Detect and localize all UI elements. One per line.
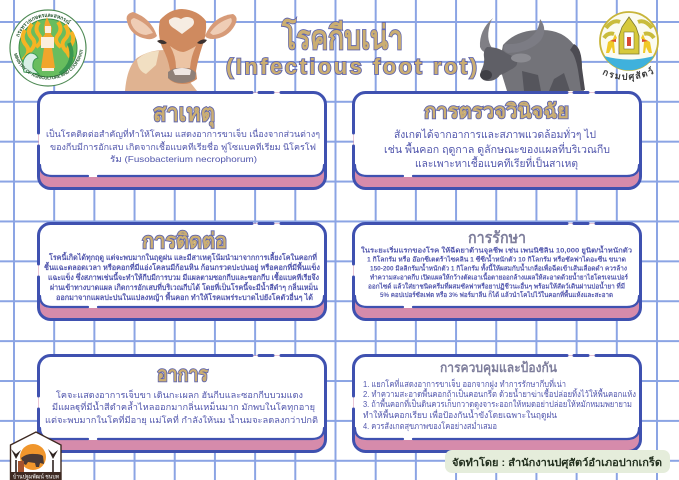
text block: 2. ทำความสะอาดพื้นคอกถ้าเป็นคอนกรีต ด้วยน้ำยาฆ่าเชื้อปล่อยทิ้งไว้ให้พื้นคอกแห้ง	[363, 388, 636, 399]
text block: ทำให้พื้นคอกเรียบ เพื่อป้องกันน้ำขังโดยเฉพาะในฤดูฝน	[363, 409, 557, 421]
credit badge: จัดทำโดย : สำนักงานปศุสัตว์อำเภอปากเกร็ด	[452, 455, 662, 469]
text block: ในระยะเริ่มแรกของโรค ให้ฉีดยาต้านจุลชีพ เช่น เพนนิซิลิน 10,000 ยูนิต/น้ำหนักตัว	[361, 244, 632, 256]
heading: สาเหตุ	[153, 100, 215, 129]
text block: โคจะแสดงอาการเจ็บขา เดินกะเผลก ฮันกีบและซอกกีบบวมแดง	[56, 389, 303, 400]
illustration: calf	[125, 9, 237, 91]
logo: Ministry of Agriculture and Cooperatives	[9, 9, 87, 87]
panel: diagnosis	[354, 92, 640, 188]
panel: causes	[38, 92, 326, 188]
text block	[45, 389, 318, 426]
text block: แฉะแข็ง ซึ่งสภาพเช่นนี้จะทำให้กีบมีการบวม มีแผลตามซอกกีบและซอกกีบ เชื้อแบคทีเรียจึง	[48, 271, 319, 282]
title	[226, 18, 477, 79]
panel: transmission	[38, 224, 326, 320]
panel: symptoms	[38, 356, 326, 452]
department name: กรมปศุสัตว์	[602, 66, 654, 82]
text block: 1. แยกโคที่แสดงอาการขาเจ็บ ออกจากฝูง ทำการรักษากีบที่เน่า	[363, 378, 566, 390]
ministry name: กระทรวงเกษตรและสหกรณ์	[16, 14, 72, 37]
text block: แต่จะพบมากในโคที่มีอายุ แม่โคที่ กำลังให้นม น้ำนมจะลดลงกว่าปกติ	[45, 414, 318, 426]
text block: มีแผลฐุที่มีน้ำสีดำคล้ำไหลออกมากลิ่นเหม็นมาก มักพบในโคทุกอายุ	[52, 401, 315, 413]
text block: สังเกตได้จากอาการและสภาพแวดล้อมทั่วๆ ไป	[394, 127, 596, 141]
text block: 4. ควรสังเกตสุขภาพของโคอย่างสม่ำเสมอ	[363, 420, 497, 432]
heading: อาการ	[157, 364, 208, 386]
text block: เป็นโรคติดต่อสำคัญที่ทำให้โคนม แสดงอาการขาเจ็บ เนื่องจากส่วนต่างๆ	[46, 128, 320, 139]
title: โรคกีบเน่า	[281, 18, 403, 56]
text block: และเพาะหาเชื้อแบคทีเรียที่เป็นสาเหตุ	[415, 156, 578, 170]
panel: treatment	[354, 224, 640, 320]
text block: ของกีบมีการอักเสบ เกิดจากเชื้อแบคทีเรียชื่อ ฟูโซแบคทีเรียม นิโครโฟ	[50, 141, 316, 153]
heading: การรักษา	[468, 229, 526, 247]
logo: house with buffalo	[10, 432, 61, 480]
panel: control and prevention	[354, 356, 640, 452]
credit badge	[445, 450, 670, 473]
text block: ผ่านเข้าทางบาดแผล เกิดการอักเสบที่บริเวณกีบได้ โดยที่เป็นโรคนี้จะมีน้ำสีดำๆ กลิ่นเหม็น	[50, 281, 319, 292]
text block: ออกไซด์ แล้วใส่ยาชนิดครีมที่ผสมซัลฟาหรือยาปฏิชีวนะอื่นๆ พร้อมให้สัตว์เดินผ่านบ่อน้ำยา ที่มี	[368, 280, 625, 290]
title: (Infectious foot rot)	[226, 54, 477, 79]
text block: โรคนี้เกิดได้ทุกฤดู แต่จะพบมากในฤดูฝน และมีสาเหตุโน้มนำมาจากการเลี้ยงโคในคอกที่	[48, 251, 317, 263]
heading: การตรวจวินิจฉัย	[424, 101, 569, 123]
text block	[46, 128, 320, 164]
ministry name	[14, 14, 83, 80]
text block: เช่น พื้นคอก ฤดูกาล ดูลักษณะของแผลที่บริเวณกีบ	[384, 142, 610, 156]
text block	[361, 244, 632, 299]
heading: การควบคุมและป้องกัน	[440, 360, 557, 376]
illustration: buffalo	[480, 18, 585, 91]
logo: Department of Livestock Development	[599, 11, 659, 82]
text block: 1 กิโลกรัม หรือ อ๊อกซีเตตร้าไซคลิน 1 ซีซี/น้ำหนักตัว 10 กิโลกรัม หรือซัลฟาไดอะซีน ขนาด	[367, 254, 626, 264]
text block	[44, 251, 320, 302]
text block: 150-200 มิลลิกรัม/น้ำหนักตัว 1 กิโลกรัม ทั้งนี้ให้ผสมกับน้ำเกลือเพื่อฉีดเข้าเส้นเลือดดำ ควรล้าง	[370, 262, 627, 272]
text block	[363, 378, 636, 432]
text block: ชื้นแฉะตลอดเวลา หรือคอกที่มีแอ่งโคลนมีก้อนหิน ก้อนกรวดปะปนอยู่ หรือคอกที่มีพื้นแข็ง	[44, 261, 320, 273]
text block: 3. ถ้าพื้นคอกที่เป็นดินควรเก็บกวาดดูงจาระออกให้หมดอย่าปล่อยให้หมักหมมพยายาม	[363, 398, 632, 410]
text block	[384, 127, 610, 170]
text block: 5% คอปเปอร์ซัลเฟต หรือ 3% ฟอร์มาลีน ก็ได้ แล้วนำโคไปไว้ในคอกที่พื้นแห้งและสะอาด	[380, 289, 613, 299]
heading: การติดต่อ	[142, 230, 227, 253]
text block: ทำความสะอาดกีบ เปิดแผลให้กว้างตัดเอาเนื้อตายออกล้างแผลให้สะอาดด้วยน้ำยาไฮโดรเจนเปอร์	[370, 272, 628, 282]
text block: รัม (Fusobacterium necrophorum)	[110, 154, 257, 164]
text block: ออกมาจากแผลปะปนในแปลงหญ้า พื้นคอก ทำให้โรคแพร่ระบาดไปยังโคตัวอื่นๆ ได้	[56, 291, 313, 302]
